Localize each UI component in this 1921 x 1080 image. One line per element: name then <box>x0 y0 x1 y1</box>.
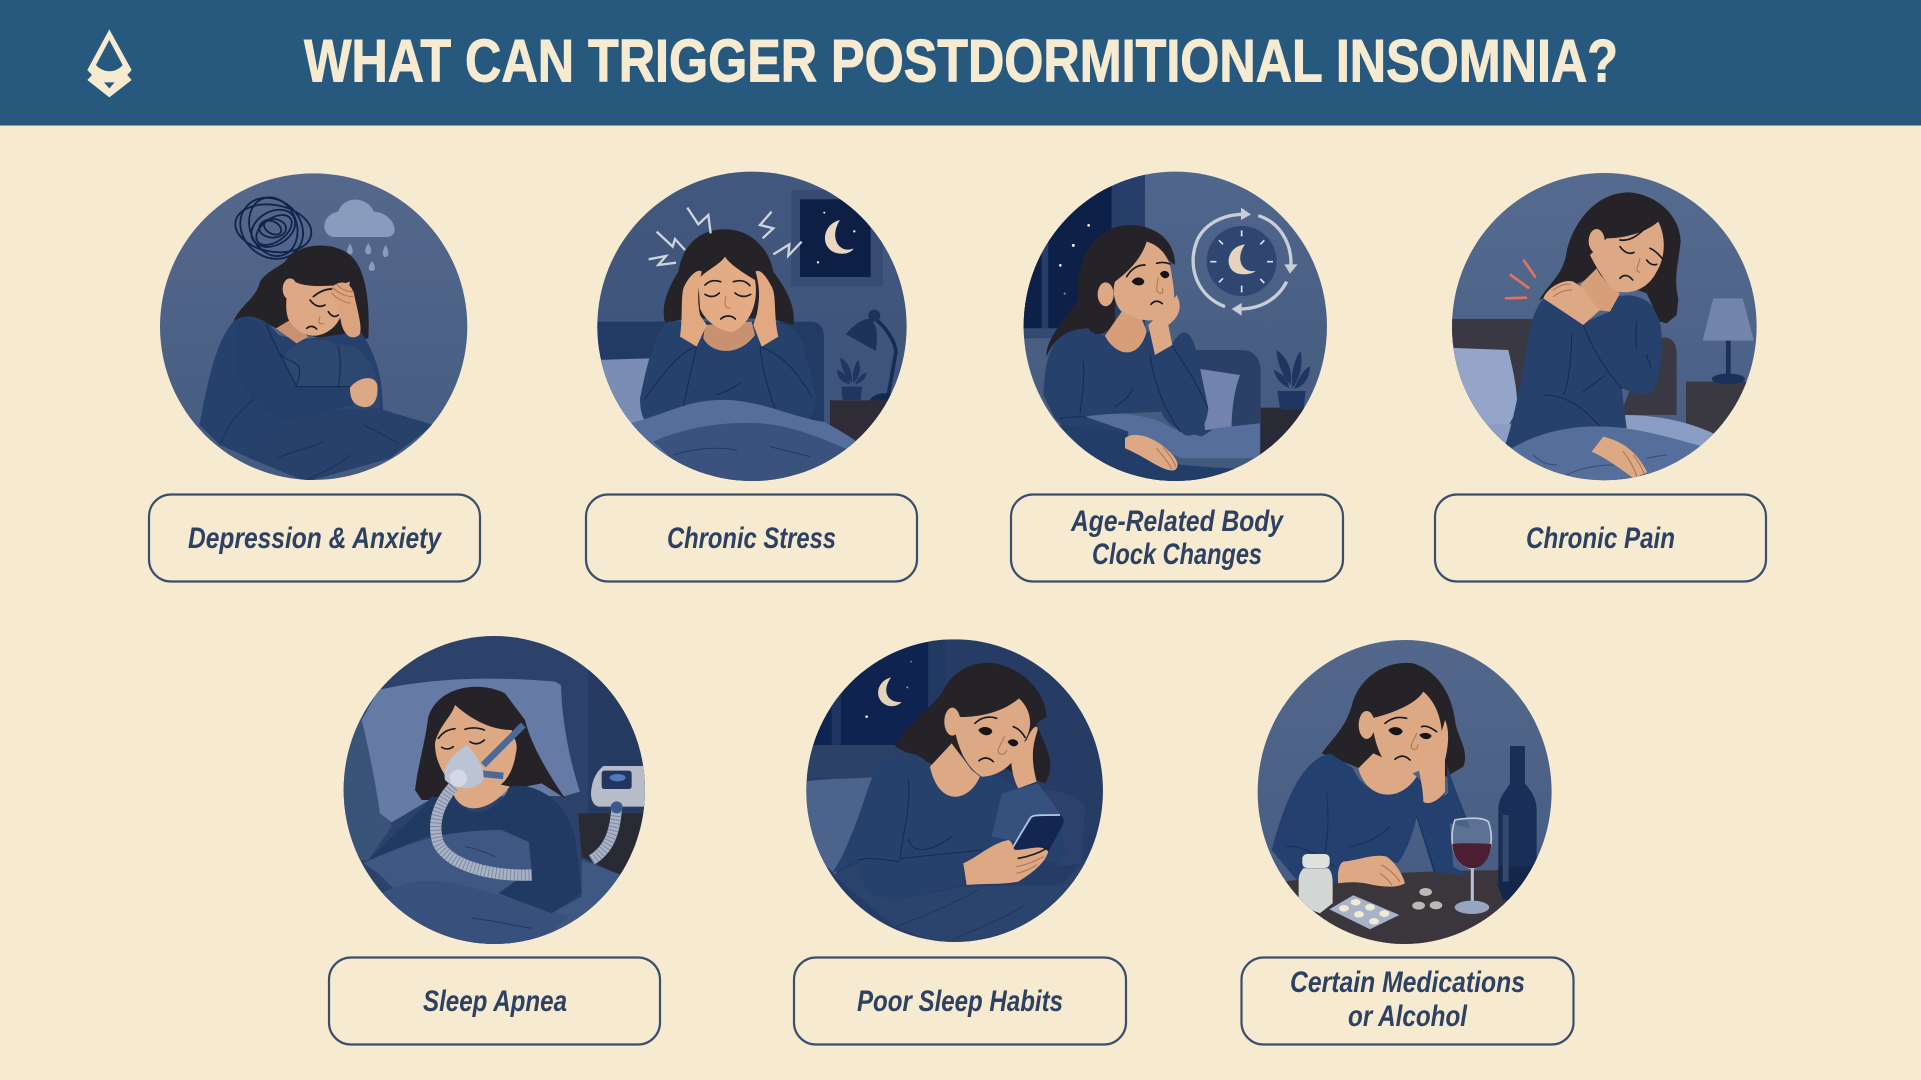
clock face <box>1207 226 1277 296</box>
label: Poor Sleep Habits <box>794 958 1126 1044</box>
face <box>953 698 1030 777</box>
hair <box>1047 225 1175 357</box>
label: Age-Related Body Clock Changes: Age-Related Body <box>1070 505 1284 538</box>
label: Poor Sleep Habits: Poor Sleep Habits <box>857 985 1063 1018</box>
right pillow <box>1045 790 1085 867</box>
label: Chronic Stress: Chronic Stress <box>667 522 836 555</box>
illustration: woman at table with pills and wine <box>1240 620 1573 953</box>
window <box>795 630 928 745</box>
pillow <box>362 679 580 822</box>
neck <box>930 743 980 797</box>
CPAP tube <box>436 787 617 875</box>
headboard <box>1194 350 1261 458</box>
icon: tangled scribble <box>234 196 312 260</box>
sweater <box>1505 295 1662 455</box>
phone <box>1012 815 1064 852</box>
hand on bed <box>1125 435 1178 470</box>
label: Certain Medications or Alcohol: Certain Medications <box>1290 966 1525 999</box>
CPAP machine <box>591 766 648 807</box>
neck <box>452 783 510 808</box>
face <box>1114 242 1174 320</box>
sweater body <box>199 316 433 482</box>
hand on knee <box>350 378 378 407</box>
nightstand <box>830 400 888 447</box>
neck <box>1105 312 1147 352</box>
sweater arm <box>254 392 331 410</box>
card: Chronic Pain <box>1435 165 1770 582</box>
illustration: woman lying awake with phone <box>795 630 1115 950</box>
neck <box>703 322 755 351</box>
blanket <box>300 424 432 480</box>
face <box>1590 222 1664 292</box>
label: Chronic Stress <box>586 494 917 582</box>
header banner <box>0 0 1921 126</box>
face <box>286 278 350 336</box>
wine glass <box>1452 818 1491 914</box>
pillow <box>1200 369 1240 430</box>
sweater <box>1272 753 1470 883</box>
table <box>1273 870 1553 953</box>
night window <box>791 190 883 287</box>
card: Sleep Apnea <box>329 630 660 1044</box>
bottle <box>1498 746 1537 900</box>
phone glow <box>992 783 1062 843</box>
hand on chin <box>1148 295 1180 355</box>
label: Sleep Apnea: Sleep Apnea <box>423 985 567 1018</box>
neck <box>276 320 308 343</box>
blanket <box>630 400 857 485</box>
illustration: woman in bed wearing CPAP mask <box>335 630 655 950</box>
neck <box>1358 753 1417 795</box>
hair <box>664 229 794 325</box>
face <box>698 257 756 332</box>
plant <box>841 387 862 400</box>
hand on forehead <box>334 282 360 338</box>
label: Depression & Anxiety <box>149 494 480 582</box>
hand on table <box>1338 856 1405 887</box>
blister pack <box>1329 895 1399 929</box>
sweater forearm <box>498 837 582 913</box>
face <box>435 705 517 793</box>
card: Chronic Stress <box>586 165 920 582</box>
label: Chronic Pain: Chronic Pain <box>1526 522 1675 555</box>
blanket dark fold <box>1058 425 1235 485</box>
hands <box>680 271 778 347</box>
nightstand <box>1686 382 1759 438</box>
label: Sleep Apnea <box>329 958 660 1044</box>
blanket <box>833 860 1095 950</box>
icon: diamond logo <box>87 29 132 97</box>
loose pills <box>1412 888 1442 910</box>
blanket light <box>1085 414 1260 458</box>
pill bottle <box>1299 868 1333 913</box>
card: Certain Medications or Alcohol <box>1240 620 1574 1044</box>
hair <box>1322 663 1465 777</box>
mask <box>444 745 484 788</box>
mask straps <box>478 725 523 776</box>
card: Poor Sleep Habits <box>794 630 1126 1044</box>
label: Age-Related Body Clock Changes <box>1011 494 1343 582</box>
icon: rain cloud <box>324 200 395 271</box>
hair <box>895 663 1050 783</box>
label: Age-Related Body Clock Changes: Clock Changes <box>1092 538 1262 571</box>
lamp <box>877 320 896 395</box>
circular arrows <box>1193 214 1291 309</box>
hair <box>1539 192 1681 323</box>
nightstand <box>578 813 648 875</box>
stress bolts <box>649 208 802 265</box>
illustration: woman hugging knees with scribble and rain cloud <box>160 173 468 480</box>
plant <box>1277 391 1306 410</box>
hair <box>415 687 565 800</box>
label: Certain Medications or Alcohol: or Alcohol <box>1348 1000 1468 1033</box>
pillow <box>1447 348 1517 428</box>
sweater <box>368 786 582 913</box>
hand on lap <box>1592 437 1647 478</box>
label: Chronic Pain <box>1435 494 1766 582</box>
hand on cheek <box>1418 720 1448 803</box>
label: Certain Medications or Alcohol <box>1242 958 1574 1044</box>
illustration: woman resting chin beside clock <box>1024 172 1327 481</box>
sweater <box>1043 328 1235 485</box>
sweater <box>640 321 677 420</box>
neck <box>1580 268 1620 312</box>
pillow <box>601 358 650 426</box>
blanket <box>363 830 622 947</box>
sweater <box>832 753 1067 900</box>
lamp <box>1703 298 1754 341</box>
hand on head <box>1011 727 1038 788</box>
pain marks <box>1506 261 1535 298</box>
bed sheet <box>1607 415 1717 455</box>
hand holding phone <box>963 840 1048 885</box>
card: Depression & Anxiety <box>149 165 480 582</box>
face <box>1372 692 1442 775</box>
headboard <box>1440 319 1533 422</box>
window <box>1024 174 1145 330</box>
pillow <box>795 777 875 875</box>
hand on shoulder <box>1543 281 1600 325</box>
blanket <box>1512 426 1703 485</box>
illustration: woman holding sore shoulder <box>1440 165 1770 490</box>
hair <box>233 246 369 342</box>
headboard <box>590 322 824 428</box>
title: WHAT CAN TRIGGER POSTDORMITIONAL INSOMNIA? <box>304 28 1618 94</box>
illustration: woman holding head in bed <box>597 172 907 481</box>
nightstand <box>1260 408 1304 454</box>
label: Depression & Anxiety: Depression & Anxiety <box>188 522 442 555</box>
card: Age-Related Body Clock Changes <box>1011 165 1345 582</box>
